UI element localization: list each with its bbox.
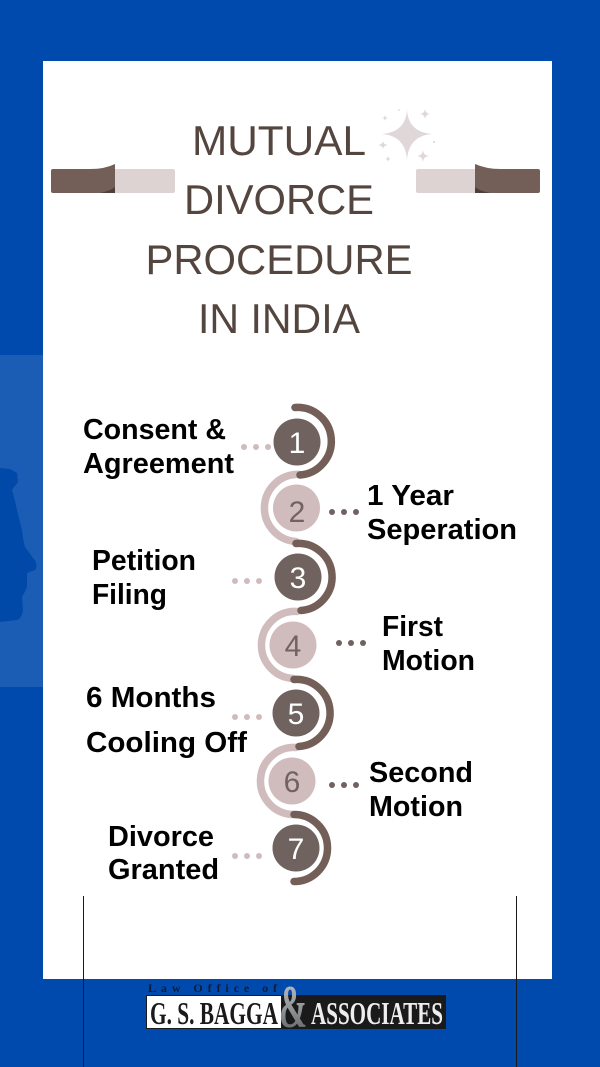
label: step 2: Seperation [367, 514, 517, 546]
dots: step 7 connector [232, 853, 262, 859]
label: step 4: Motion [382, 645, 475, 677]
step 3 node [274, 543, 332, 610]
dots: step 5 connector [232, 714, 262, 720]
dots: step 1 connector [241, 444, 271, 450]
panel: white card [43, 61, 552, 979]
label: step 5: Cooling Off [86, 727, 247, 759]
label: step 3 [92, 545, 196, 611]
dots: step 6 connector [329, 782, 359, 788]
step 1 node: 1 [289, 427, 305, 460]
title [146, 117, 412, 342]
logo: law office: G. S. BAGGA [150, 995, 278, 1031]
label: step 2 [367, 480, 517, 546]
step 7 node: 7 [288, 833, 304, 866]
step 5 node: 5 [288, 698, 304, 731]
label: step 7 [108, 821, 219, 886]
logo: law office [146, 974, 446, 1040]
step 4 node [261, 611, 316, 678]
label: step 5: 6 Months [86, 682, 216, 714]
step 6 node [260, 747, 316, 814]
icon: head silhouette [0, 468, 36, 622]
logo: law office: Law Office of [148, 981, 278, 995]
step 7 node [272, 814, 328, 882]
step 1 node [274, 407, 331, 475]
label: step 6: Motion [369, 791, 463, 823]
logo: law office: ASSOCIATES [311, 995, 443, 1031]
dots: step 2 connector [329, 509, 359, 515]
label: step 5 [86, 682, 247, 759]
logo: law office: & [279, 974, 307, 1040]
dots: step 3 connector [232, 578, 262, 584]
label: step 4 [382, 611, 475, 677]
label: step 4: First [382, 611, 443, 643]
step 6 node: 6 [284, 766, 300, 799]
step 4 node: 4 [285, 630, 301, 663]
label: step 6 [369, 757, 473, 823]
icon: sparkles [378, 109, 435, 162]
chart: step timeline [260, 407, 332, 882]
panel: light side band [0, 355, 43, 687]
step 2 node [264, 474, 320, 542]
title: DIVORCE [184, 176, 374, 223]
step 5 node [272, 679, 330, 746]
dots: step 4 connector [336, 640, 366, 646]
label: step 6: Second [369, 757, 473, 789]
step 3 node: 3 [290, 562, 306, 595]
step 2 node: 2 [289, 496, 305, 529]
label: step 1: Agreement [83, 448, 234, 480]
title: MUTUAL [192, 117, 366, 164]
label: step 3: Filing [92, 579, 167, 611]
title: IN INDIA [198, 295, 360, 342]
title: PROCEDURE [146, 236, 412, 283]
label: step 7: Granted [108, 854, 219, 886]
ribbon: right [416, 164, 540, 193]
label: step 2: 1 Year [367, 480, 454, 512]
label: step 3: Petition [92, 545, 196, 577]
ribbon: left [51, 164, 175, 193]
label: step 7: Divorce [108, 821, 214, 853]
label: step 1: Consent & [83, 414, 226, 446]
lines: bottom verticals [84, 896, 516, 1067]
label: step 1 [83, 414, 234, 480]
